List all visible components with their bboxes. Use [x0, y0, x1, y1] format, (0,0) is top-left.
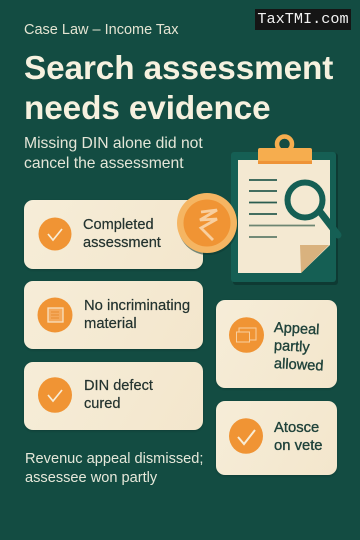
- card: appeal partly allowed: [216, 300, 337, 388]
- subtitle: Missing DIN alone did not: [24, 135, 203, 152]
- eyebrow: category: Case Law – Income Tax: [24, 22, 178, 38]
- title: needs evidence: [24, 90, 271, 126]
- card: completed assessment: [24, 200, 203, 269]
- card: no incriminating material: [24, 281, 203, 349]
- icon: check badge: [38, 218, 72, 250]
- label: allowed: [274, 356, 324, 375]
- icon: check badge: [229, 418, 263, 454]
- label: on vete: [274, 438, 323, 454]
- closing note: [25, 451, 203, 486]
- watermark: TaxTMI.com: TaxTMI.com: [257, 10, 349, 28]
- clip: [277, 136, 292, 152]
- label: material: [84, 316, 137, 332]
- icon: check badge: [38, 377, 72, 413]
- label: [84, 378, 153, 412]
- label: [84, 298, 190, 332]
- label: Appeal: [274, 320, 320, 338]
- icon: document badge: [38, 298, 72, 332]
- label: Completed: [83, 217, 154, 233]
- label: [274, 420, 323, 454]
- closing note: Revenuc appeal dismissed;: [25, 451, 203, 467]
- title: Search assessment: [24, 50, 333, 87]
- label: Atosce: [274, 420, 319, 436]
- label: [83, 217, 161, 251]
- label: No incriminating: [84, 298, 190, 314]
- magnifier lens: [288, 182, 322, 218]
- paper sheet: [238, 160, 330, 273]
- folded corner: [300, 245, 329, 273]
- label: partly: [274, 338, 310, 356]
- label: DIN defect: [84, 378, 153, 394]
- card: DIN defect cured: [24, 362, 203, 430]
- subtitle: cancel the assessment: [24, 155, 184, 172]
- icon: screens badge: [229, 317, 264, 353]
- card: atosce on vete: [216, 401, 337, 475]
- subtitle: [24, 135, 203, 172]
- clipboard board: [233, 153, 338, 285]
- closing note: assessee won partly: [25, 470, 157, 486]
- title: [24, 50, 333, 126]
- label: cured: [84, 396, 121, 412]
- label: assessment: [83, 235, 161, 251]
- magnifier handle: [321, 213, 338, 235]
- text lines: [249, 180, 277, 214]
- label: [274, 320, 324, 375]
